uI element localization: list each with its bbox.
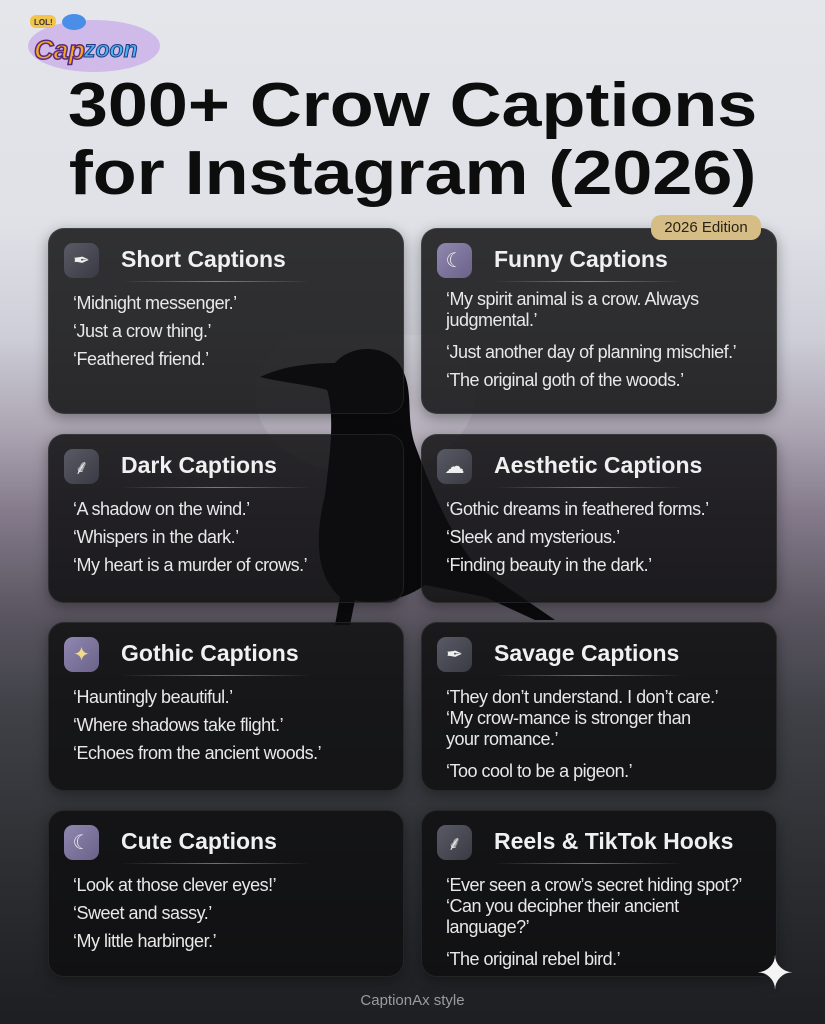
- heading: Funny Captions: [494, 246, 668, 272]
- text block: ‘Can you decipher their ancient: [446, 896, 679, 916]
- crow illustration: [260, 349, 555, 625]
- logo: zoon: [83, 36, 138, 62]
- title: [68, 71, 757, 208]
- logo: [28, 14, 160, 72]
- text block: ‘Hauntingly beautiful.’: [73, 687, 233, 707]
- text block: ‘Gothic dreams in feathered forms.’: [446, 499, 709, 519]
- icon: moon: ☾: [446, 250, 463, 272]
- panel: short captions: [48, 228, 404, 414]
- icon: cloud: ☁: [444, 456, 464, 478]
- text block: ‘My spirit animal is a crow. Always: [446, 289, 699, 309]
- panel: savage captions: [421, 622, 777, 791]
- heading: Savage Captions: [494, 640, 679, 666]
- badge: 2026 Edition: 2026 Edition: [664, 219, 748, 236]
- text block: [73, 293, 237, 369]
- panel: gothic captions: [48, 622, 404, 791]
- text block: ‘Just a crow thing.’: [73, 321, 211, 341]
- logo: Cap: [34, 35, 85, 65]
- text block: ‘The original goth of the woods.’: [446, 370, 684, 390]
- panel: dark captions: [48, 434, 404, 603]
- icon: sparkles: ✦: [73, 644, 90, 666]
- text block: ‘A shadow on the wind.’: [73, 499, 250, 519]
- panel: funny captions: [421, 228, 777, 414]
- icon: feather: [437, 637, 472, 672]
- panel: aesthetic captions: [421, 434, 777, 603]
- text block: [73, 875, 276, 951]
- text block: ‘Look at those clever eyes!’: [73, 875, 276, 895]
- text block: ‘Where shadows take flight.’: [73, 715, 283, 735]
- text block: ‘My little harbinger.’: [73, 931, 216, 951]
- text block: ‘Ever seen a crow’s secret hiding spot?’: [446, 875, 742, 895]
- panel: reels hooks: [421, 810, 777, 977]
- text block: ‘Sweet and sassy.’: [73, 903, 212, 923]
- heading: Aesthetic Captions: [494, 452, 702, 478]
- text block: ‘Sleek and mysterious.’: [446, 527, 620, 547]
- heading: Reels & TikTok Hooks: [494, 828, 733, 854]
- icon: branch: [64, 449, 99, 484]
- heading: Cute Captions: [121, 828, 277, 854]
- text block: ‘They don’t understand. I don’t care.’: [446, 687, 718, 707]
- icon: feather: [64, 243, 99, 278]
- logo: LOL!: [34, 18, 53, 27]
- text block: ‘Feathered friend.’: [73, 349, 209, 369]
- panel: cute captions: [48, 810, 404, 977]
- icon: sparkles: [64, 637, 99, 672]
- text block: [446, 875, 742, 969]
- icon: moon: ☾: [73, 832, 90, 854]
- text block: your romance.’: [446, 729, 558, 749]
- icon: sparkle: ✦: [756, 947, 794, 999]
- icon: branch: ⸙: [447, 833, 462, 855]
- text block: [446, 687, 718, 781]
- text block: ‘The original rebel bird.’: [446, 949, 620, 969]
- text block: language?’: [446, 917, 529, 937]
- icon: branch: [437, 825, 472, 860]
- title: for Instagram (2026): [69, 139, 756, 208]
- badge: 2026 Edition: [651, 215, 761, 240]
- icon: moon: [64, 825, 99, 860]
- text block: [446, 499, 709, 575]
- text block: ‘My crow-mance is stronger than: [446, 708, 691, 728]
- text block: ‘Midnight messenger.’: [73, 293, 237, 313]
- text block: judgmental.’: [446, 310, 537, 330]
- icon: feather: ✒: [446, 644, 463, 666]
- heading: Dark Captions: [121, 452, 277, 478]
- heading: Gothic Captions: [121, 640, 299, 666]
- text block: [446, 289, 736, 390]
- icon: cloud: [437, 449, 472, 484]
- text block: ‘My heart is a murder of crows.’: [73, 555, 307, 575]
- text block: ‘Whispers in the dark.’: [73, 527, 239, 547]
- text block: ‘Too cool to be a pigeon.’: [446, 761, 632, 781]
- icon: moon: [437, 243, 472, 278]
- text block: ‘Echoes from the ancient woods.’: [73, 743, 321, 763]
- heading: Short Captions: [121, 246, 286, 272]
- text block: [73, 687, 321, 763]
- icon: branch: ⸙: [74, 457, 89, 479]
- title: 300+ Crow Captions: [68, 71, 757, 140]
- icon: feather: ✒: [73, 250, 90, 272]
- text block: ‘Just another day of planning mischief.’: [446, 342, 736, 362]
- footer: CaptionAx style: [360, 992, 465, 1009]
- text block: [73, 499, 307, 575]
- text block: ‘Finding beauty in the dark.’: [446, 555, 652, 575]
